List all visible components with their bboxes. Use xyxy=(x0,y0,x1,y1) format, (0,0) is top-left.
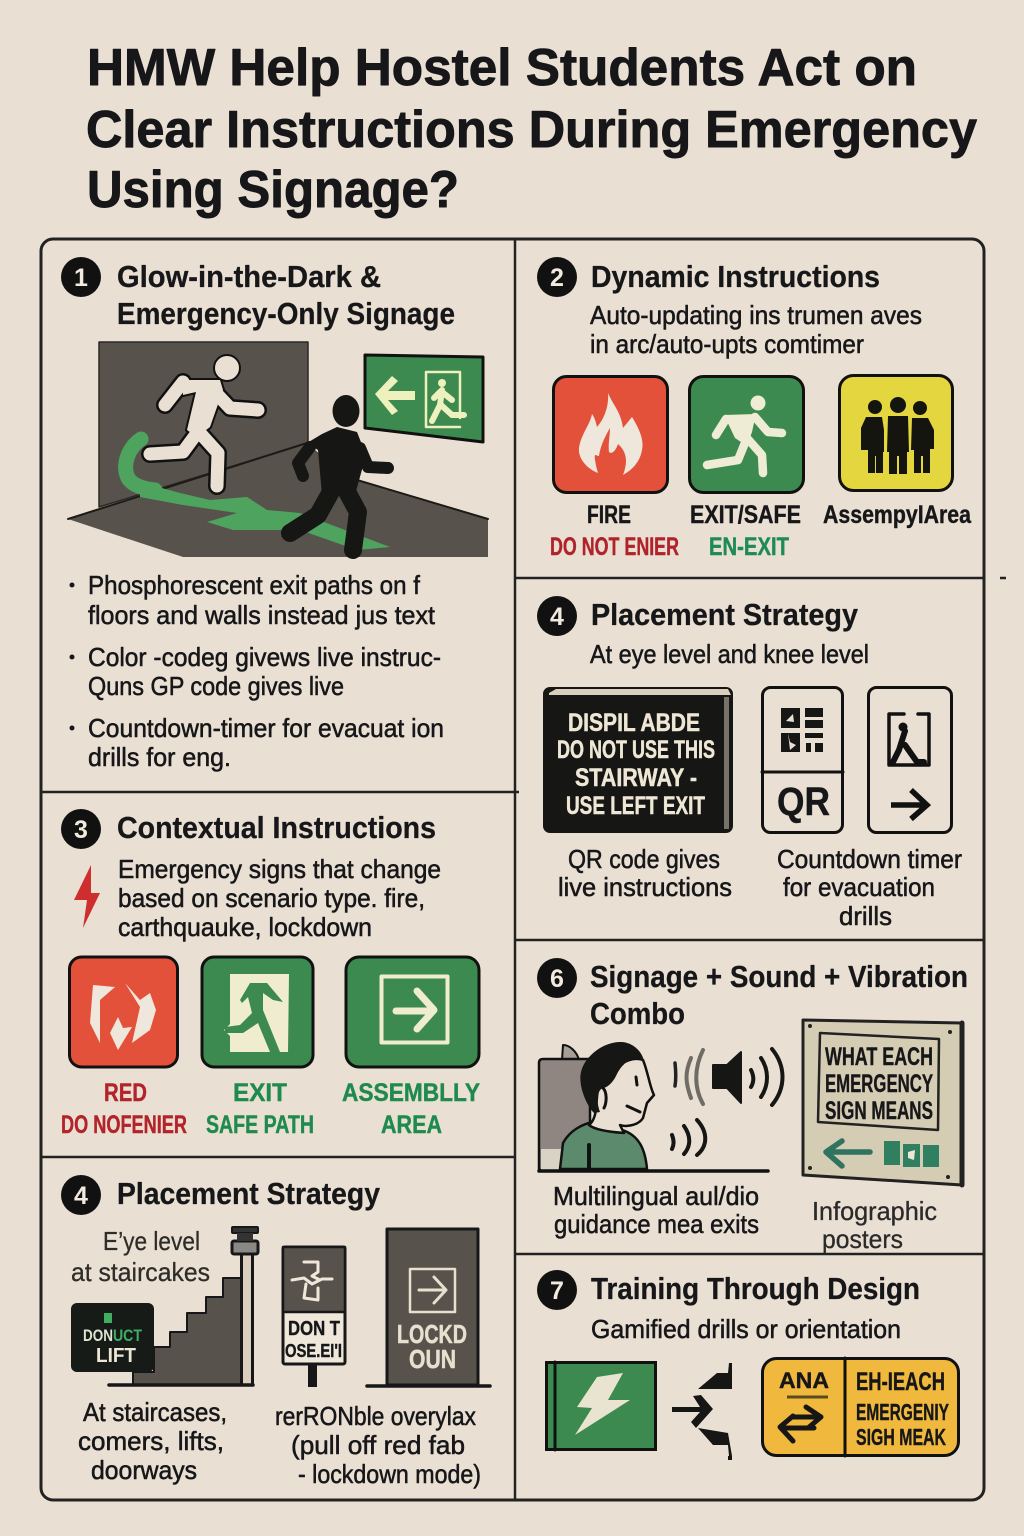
illustration: person listening to audio guidance xyxy=(539,1042,782,1171)
number badge 6: 6 xyxy=(550,965,564,993)
title xyxy=(86,39,977,219)
captions: live instructions xyxy=(558,872,732,902)
captions: rerRONble overylax xyxy=(275,1401,476,1431)
sign labels: SAFE PATH xyxy=(206,1111,314,1139)
illustration: QR sign xyxy=(762,688,843,832)
number badge 4 right xyxy=(537,596,577,636)
illustration: poster what each emergency sign means xyxy=(803,1020,962,1185)
captions xyxy=(558,844,962,931)
icon: yellow training sign: ANA xyxy=(779,1368,829,1393)
icon: red fire sign xyxy=(70,957,178,1067)
illustration: staircase with lift sign xyxy=(71,1227,258,1385)
captions: posters xyxy=(822,1224,903,1254)
illustration: lockdown door xyxy=(367,1229,490,1386)
description: Auto-updating ins trumen aves xyxy=(590,300,922,330)
icon: yellow training sign xyxy=(762,1358,958,1456)
icon: assembly area sign xyxy=(840,376,952,490)
bullet list xyxy=(70,570,444,772)
sign labels: RED xyxy=(104,1079,147,1107)
number badge 3: 3 xyxy=(74,816,88,844)
heading: glow-in-the-dark: Emergency-Only Signage xyxy=(117,296,455,331)
caption: eye level: at staircakes xyxy=(71,1257,210,1287)
description: At eye level and knee level xyxy=(590,639,869,669)
bullet list: Quns GP code gives live xyxy=(88,671,344,701)
heading: signage sound vibration: Combo xyxy=(590,996,685,1031)
captions: - lockdown mode) xyxy=(298,1459,481,1489)
heading: dynamic instructions: Dynamic Instructions xyxy=(591,259,880,294)
captions: QR code gives xyxy=(568,844,720,874)
illustration: poster what each emergency sign means: EMERGENCY xyxy=(825,1070,933,1098)
sign labels: EXIT/SAFE xyxy=(690,501,801,529)
illustration: overlay sign on post: DON T xyxy=(288,1318,340,1340)
captions: drills xyxy=(839,901,892,931)
panel: placement strategy (right) xyxy=(537,596,962,931)
bullet list: Phosphorescent exit paths on f xyxy=(88,570,421,600)
captions xyxy=(553,1181,937,1254)
captions xyxy=(78,1397,481,1489)
heading: glow-in-the-dark xyxy=(117,259,455,331)
number badge 2 xyxy=(537,257,577,297)
icon: fire sign xyxy=(554,376,668,492)
number badge 4 xyxy=(61,1175,101,1215)
icon: yellow training sign: EMERGENIY xyxy=(856,1399,949,1425)
icon: green exit door sign xyxy=(202,957,313,1067)
icon: exit runner sign xyxy=(690,376,804,492)
description: carthquauke, lockdown xyxy=(118,912,372,942)
panel: contextual instructions xyxy=(61,809,480,1139)
sign labels xyxy=(550,501,972,561)
heading: contextual instructions: Contextual Instructions xyxy=(117,810,436,845)
number badge 1: 1 xyxy=(74,264,88,292)
captions: (pull off red fab xyxy=(291,1430,465,1460)
illustration: QR sign: QR xyxy=(777,780,830,824)
title: Clear Instructions During Emergency xyxy=(86,101,977,159)
sign labels: AREA xyxy=(381,1111,442,1139)
description: Emergency signs that change xyxy=(118,854,441,884)
icon: red lightning bolt xyxy=(74,865,100,928)
panel: training through design xyxy=(537,1270,958,1460)
captions: for evacuation xyxy=(783,872,935,902)
icon: yellow training sign: SIGH MEAK xyxy=(856,1424,946,1450)
heading: signage sound vibration: Signage + Sound + Vibration xyxy=(590,959,968,994)
illustration: dynamic display sign: DISPIL ABDE xyxy=(568,709,700,737)
panel: glow-in-the-dark signage xyxy=(61,257,488,772)
illustration: staircase with lift sign: UCT xyxy=(113,1326,142,1345)
illustration: overlay sign on post: OSE.EI'I xyxy=(285,1341,342,1361)
illustration: overlay sign on post xyxy=(283,1247,345,1387)
bullet list: floors and walls instead jus text xyxy=(88,600,436,630)
sign labels: AssempyIArea xyxy=(823,501,972,529)
heading: glow-in-the-dark: Glow-in-the-Dark & xyxy=(117,259,381,294)
captions: Infographic xyxy=(812,1196,937,1226)
illustration: dynamic display sign: DO NOT USE THIS xyxy=(557,736,715,764)
illustration: lockdown door: LOCKD xyxy=(397,1319,467,1349)
illustration: exit arrow sign xyxy=(868,688,952,832)
bullet list: Countdown-timer for evacuat ion xyxy=(88,713,444,743)
illustration: staircase with lift sign: LIFT xyxy=(96,1345,136,1367)
caption: eye level: E’ye level xyxy=(103,1226,200,1256)
panel: placement strategy (left) xyxy=(61,1175,490,1489)
icon: yellow training sign: EH-IEACH xyxy=(856,1368,945,1396)
captions: Countdown timer xyxy=(777,844,962,874)
number badge 2: 2 xyxy=(550,264,564,292)
sign labels xyxy=(61,1079,480,1139)
description: Gamified drills or orientation xyxy=(591,1314,901,1344)
title: Using Signage? xyxy=(87,161,459,219)
description: in arc/auto-upts comtimer xyxy=(590,329,864,359)
heading: signage sound vibration xyxy=(590,959,968,1031)
sign labels: ASSEMBLLY xyxy=(342,1079,480,1107)
sign labels: DO NOT ENIER xyxy=(550,533,679,561)
captions: comers, lifts, xyxy=(78,1426,224,1456)
number badge 3 xyxy=(61,809,101,849)
description xyxy=(590,300,922,359)
captions: doorways xyxy=(91,1455,197,1485)
panel: dynamic instructions xyxy=(537,257,972,561)
number badge 4 right: 4 xyxy=(550,603,564,631)
illustration: poster what each emergency sign means: SIGN MEANS xyxy=(825,1097,933,1125)
illustration: corridor with glowing path and exit sign xyxy=(68,342,488,557)
illustration: lockdown door: OUN xyxy=(409,1344,456,1374)
illustration: dynamic display sign: USE LEFT EXIT xyxy=(566,792,705,820)
sign labels: EXIT xyxy=(233,1079,287,1107)
illustration: poster what each emergency sign means: WHAT EACH xyxy=(825,1043,933,1071)
heading: placement strategy right: Placement Strategy xyxy=(591,597,859,632)
icon: green assembly arrow sign xyxy=(346,957,479,1067)
heading: training through design: Training Through Design xyxy=(591,1271,920,1306)
icon: green lightning sign xyxy=(546,1362,656,1450)
title: HMW Help Hostel Students Act on xyxy=(87,39,917,97)
icon: converging arrows xyxy=(672,1363,732,1460)
illustration: dynamic display sign: STAIRWAY - xyxy=(575,764,697,792)
illustration: dynamic display sign xyxy=(543,687,733,833)
bullet list: drills for eng. xyxy=(88,742,231,772)
sign labels: FIRE xyxy=(587,501,631,529)
sign labels: EN-EXIT xyxy=(709,533,789,561)
number badge 7 xyxy=(537,1270,577,1310)
heading: placement strategy: Placement Strategy xyxy=(117,1176,381,1211)
number badge 4: 4 xyxy=(74,1182,88,1210)
number badge 1 xyxy=(61,257,101,297)
caption: eye level xyxy=(71,1226,210,1287)
bullet list: Color -codeg givews live instruc- xyxy=(88,642,441,672)
illustration: staircase with lift sign: DON xyxy=(83,1326,113,1345)
captions: At staircases, xyxy=(83,1397,227,1427)
description xyxy=(118,854,441,942)
sign labels: DO NOFENIER xyxy=(61,1111,187,1139)
number badge 6 xyxy=(537,958,577,998)
description: based on scenario type. fire, xyxy=(118,883,425,913)
panel: signage + sound + vibration xyxy=(537,958,968,1254)
captions: guidance mea exits xyxy=(554,1209,759,1239)
number badge 7: 7 xyxy=(550,1277,564,1305)
captions: Multilingual aul/dio xyxy=(553,1181,759,1211)
